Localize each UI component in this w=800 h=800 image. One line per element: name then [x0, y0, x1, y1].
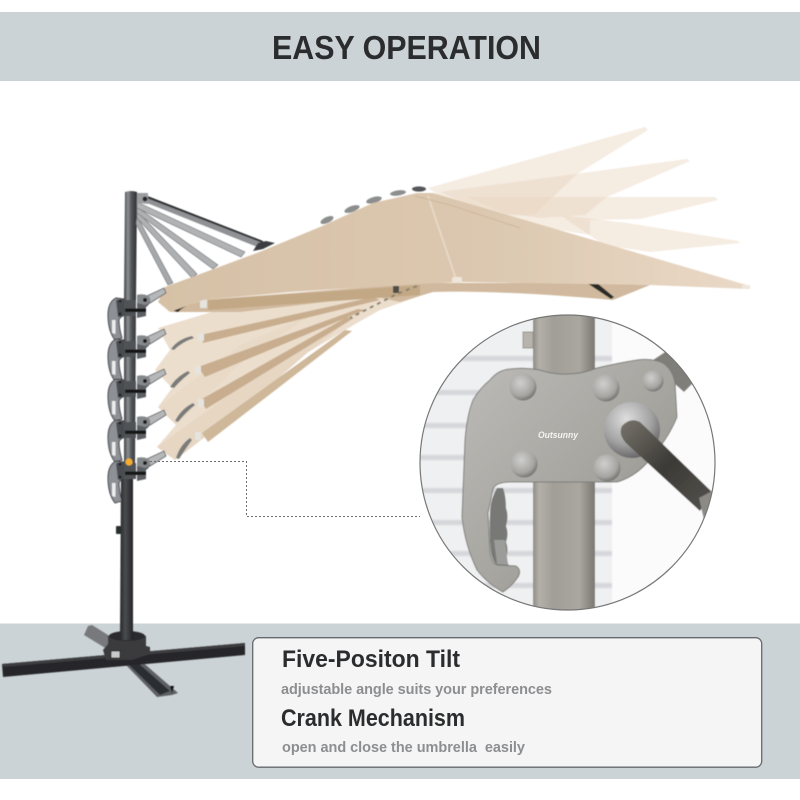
pole: [116, 191, 137, 640]
lower ghost canopies: [155, 296, 420, 460]
cross base: [2, 625, 245, 697]
heading: crank mechanism: Crank Mechanism: [281, 705, 465, 732]
clamp handle 4: [108, 410, 166, 462]
clamp handle 2: [108, 329, 166, 381]
ghost canopy tilted up 4: [560, 215, 740, 252]
siding background: [415, 310, 720, 615]
canopy hardware: [319, 186, 426, 318]
orange marker dot: [125, 458, 133, 466]
brand mark: Outsunny: [538, 430, 579, 441]
heading: five-position tilt: Five-Positon Tilt: [282, 646, 460, 673]
rivets: [510, 370, 664, 482]
upper strut: [654, 352, 692, 392]
clamp handle 1: [108, 288, 166, 340]
clamp handle 5: [108, 451, 166, 503]
medallion pole: [533, 310, 595, 615]
dashed leader line: [150, 462, 420, 516]
grip recess: [490, 488, 509, 566]
umbrella illustration: [2, 127, 750, 697]
detail medallion: crank mechanism: [415, 310, 720, 615]
ghost canopy tilted up 3: [467, 197, 718, 235]
crank handle: [621, 420, 712, 511]
ghost canopy tilted up 1: [428, 127, 648, 215]
text panel: [253, 638, 762, 767]
crank socket: [604, 402, 660, 458]
header band: [0, 12, 800, 81]
main canopy top: [158, 193, 750, 312]
rib fan: [136, 193, 275, 285]
ghost canopy tilted up 2: [440, 159, 690, 218]
text: adjustable angle: adjustable angle suits your preferences: [281, 682, 552, 698]
title: EASY OPERATION: [272, 30, 541, 67]
clamp plate: [462, 359, 677, 592]
text: open and close: open and close the umbrella easily: [282, 740, 525, 756]
main canopy underside: [170, 283, 650, 312]
bottom band: [0, 624, 800, 779]
clamp handle 3: [108, 369, 166, 421]
